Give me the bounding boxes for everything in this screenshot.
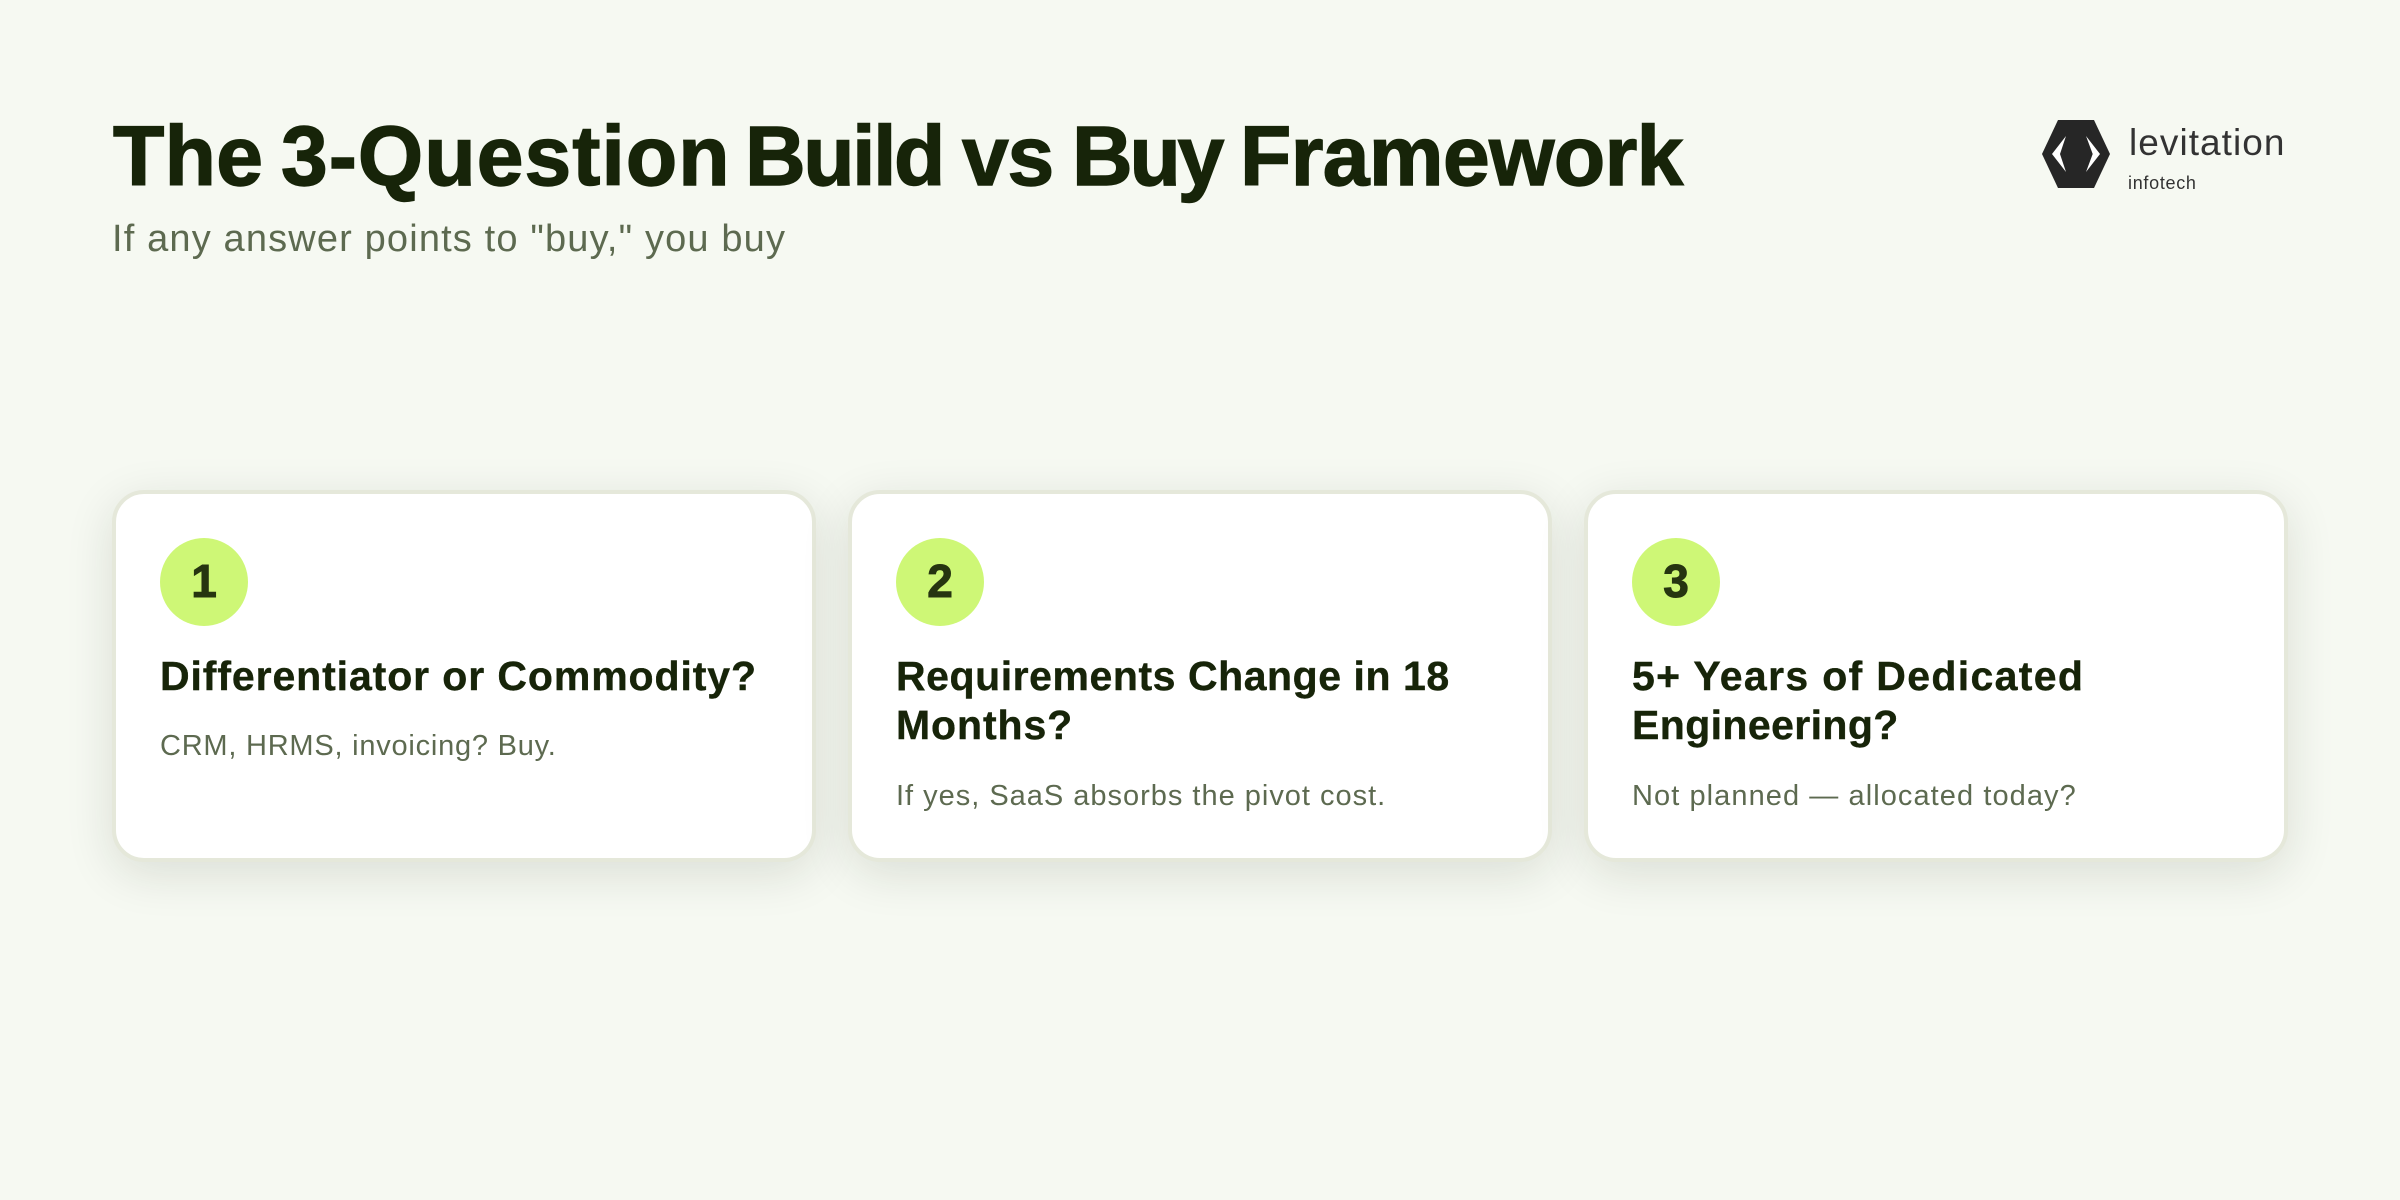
logo wordmark: levitation <box>2129 122 2286 163</box>
panel: question 1 <box>112 490 816 862</box>
title: The <box>113 109 263 203</box>
question 3 description: Not planned — allocated today? <box>1632 780 2077 812</box>
question 1 heading: Differentiator or Commodity? <box>160 653 757 699</box>
title: Buy <box>1072 109 1221 203</box>
number badge 2 <box>896 538 984 626</box>
question 3 heading <box>1632 653 2084 748</box>
number badge 2: 2 <box>927 555 953 607</box>
panel: question 2 <box>848 490 1552 862</box>
question 2 heading <box>896 653 1450 748</box>
title: 3-Question <box>281 109 731 203</box>
question 2 description: If yes, SaaS absorbs the pivot cost. <box>896 780 1386 812</box>
logo <box>2042 120 2286 193</box>
number badge 3: 3 <box>1663 555 1689 607</box>
question 2 heading: Months? <box>896 702 1073 748</box>
title: Build <box>745 109 943 203</box>
logo subtext: infotech <box>2128 173 2197 193</box>
panel: question 3 <box>1584 490 2288 862</box>
icon: hexagon code brackets <box>2042 120 2110 188</box>
number badge 1: 1 <box>191 555 217 607</box>
subtitle: If any answer points to "buy," you buy <box>112 218 786 260</box>
number badge 1 <box>160 538 248 626</box>
title: Framework <box>1240 109 1683 203</box>
title <box>113 109 1685 204</box>
question 3 heading: Engineering? <box>1632 702 1899 748</box>
question 3 heading: 5+ Years of Dedicated <box>1632 653 2084 699</box>
question 1 description: CRM, HRMS, invoicing? Buy. <box>160 730 557 762</box>
number badge 3 <box>1632 538 1720 626</box>
title: vs <box>962 109 1053 203</box>
question 2 heading: Requirements Change in 18 <box>896 653 1450 699</box>
